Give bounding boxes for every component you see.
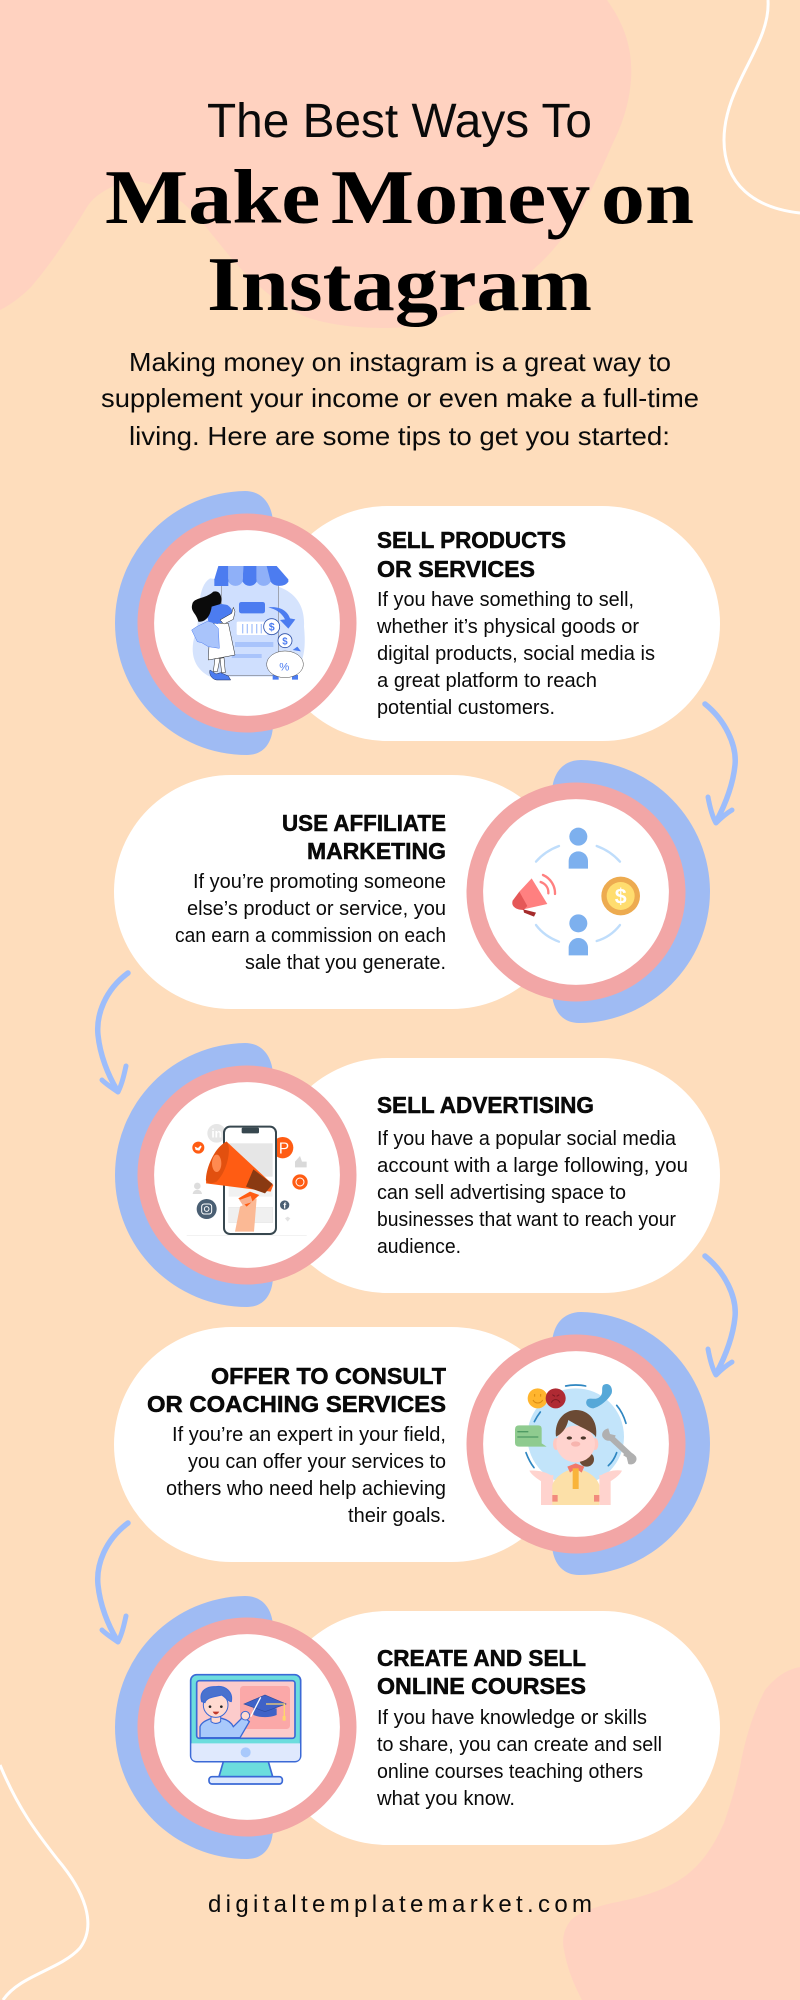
heading xyxy=(377,1645,586,1699)
ring xyxy=(475,1343,677,1545)
white pill xyxy=(114,1327,569,1562)
body xyxy=(166,1424,446,1527)
decorative line: top right xyxy=(724,0,800,213)
heading xyxy=(147,1363,446,1417)
blue crescent xyxy=(115,491,273,755)
body xyxy=(376,589,655,719)
body: to share, you can create and sell xyxy=(377,1734,662,1756)
footer url: digitaltemplatemarket.com xyxy=(208,1891,592,1918)
heading: MARKETING xyxy=(307,838,446,864)
icon: online store shopper: $ xyxy=(282,636,288,647)
arrow: step 3 to 4 xyxy=(705,1256,735,1375)
icon: customer support woman xyxy=(515,1384,637,1505)
title line 3: Instagram xyxy=(207,241,592,327)
text: sell advertising xyxy=(377,1092,688,1258)
title xyxy=(105,95,694,327)
icon: phone with megaphone: P xyxy=(279,1140,289,1157)
body: you can offer your services to xyxy=(188,1451,446,1473)
body: businesses that want to reach your xyxy=(377,1209,676,1231)
body: can sell advertising space to xyxy=(377,1182,626,1204)
body: If you have a popular social media xyxy=(377,1128,677,1150)
icon: online teacher on monitor xyxy=(191,1675,301,1784)
heading: CREATE AND SELL xyxy=(377,1645,586,1671)
body: sale that you generate. xyxy=(245,952,446,974)
body: else’s product or service, you xyxy=(187,898,446,920)
heading: OR COACHING SERVICES xyxy=(147,1391,446,1417)
body xyxy=(175,871,446,974)
white pill xyxy=(270,506,720,741)
icon: online store shopper xyxy=(192,566,305,680)
intro paragraph xyxy=(101,347,699,451)
body: account with a large following, you xyxy=(377,1155,688,1177)
icon: phone with megaphone: in xyxy=(211,1127,222,1141)
intro paragraph: supplement your income or even make a full-time xyxy=(101,383,699,413)
body: online courses teaching others xyxy=(377,1761,643,1783)
body: potential customers. xyxy=(377,697,555,719)
ring xyxy=(146,1626,348,1828)
intro paragraph: Making money on instagram is a great way to xyxy=(129,347,671,377)
body: whether it’s physical goods or xyxy=(376,616,639,638)
intro paragraph: living. Here are some tips to get you started: xyxy=(129,421,670,451)
text: sell products xyxy=(376,527,655,719)
heading: SELL PRODUCTS xyxy=(377,527,566,553)
white pill xyxy=(270,1058,720,1293)
body: If you have knowledge or skills xyxy=(377,1707,647,1729)
body: others who need help achieving xyxy=(166,1478,446,1500)
panel: offer to consult xyxy=(114,1312,710,1575)
body xyxy=(377,1128,688,1258)
white pill xyxy=(270,1611,720,1845)
text: use affiliate marketing xyxy=(175,810,446,974)
text: offer to consult xyxy=(147,1363,446,1527)
body: audience. xyxy=(377,1236,461,1258)
body: can earn a commission on each xyxy=(175,925,446,947)
icon: affiliate network xyxy=(512,828,640,955)
body xyxy=(376,1707,662,1810)
blob: top left xyxy=(0,0,631,328)
text: online courses xyxy=(376,1645,662,1810)
icon: affiliate network: $ xyxy=(615,885,627,909)
body: If you have something to sell, xyxy=(377,589,634,611)
heading: SELL ADVERTISING xyxy=(377,1092,594,1118)
panel: online courses xyxy=(115,1596,720,1859)
panel: use affiliate marketing xyxy=(114,760,710,1023)
body: digital products, social media is xyxy=(377,643,655,665)
ring xyxy=(146,1074,348,1276)
panel: sell advertising xyxy=(115,1043,720,1307)
title line 2: Make Money on xyxy=(105,154,694,240)
heading: OFFER TO CONSULT xyxy=(211,1363,446,1389)
body: their goals. xyxy=(348,1505,446,1527)
blue crescent xyxy=(115,1596,273,1859)
heading xyxy=(282,810,446,864)
body: If you’re an expert in your field, xyxy=(172,1424,446,1446)
ring xyxy=(475,791,677,993)
panel: sell products xyxy=(115,491,720,755)
body: a great platform to reach xyxy=(377,670,597,692)
arrow: step 2 to 3 xyxy=(98,973,128,1092)
arrow: step 4 to 5 xyxy=(98,1523,128,1642)
heading: ONLINE COURSES xyxy=(377,1673,586,1699)
blue crescent xyxy=(552,760,710,1023)
blue crescent xyxy=(115,1043,273,1307)
ring xyxy=(146,522,348,724)
heading: USE AFFILIATE xyxy=(282,810,446,836)
blob: bottom right xyxy=(563,1667,800,2000)
body: what you know. xyxy=(376,1788,515,1810)
body: If you’re promoting someone xyxy=(193,871,446,893)
heading: OR SERVICES xyxy=(377,556,535,582)
title line 1: The Best Ways To xyxy=(207,95,592,148)
icon: phone with megaphone: f xyxy=(283,1200,286,1210)
icon: online store shopper: % xyxy=(279,662,289,674)
heading xyxy=(377,527,566,582)
decorative line: bottom left xyxy=(0,1765,88,2000)
arrow: step 1 to 2 xyxy=(705,704,735,823)
icon: online store shopper: $ xyxy=(269,622,275,634)
white pill xyxy=(114,775,569,1009)
blue crescent xyxy=(552,1312,710,1575)
icon: phone with megaphone xyxy=(187,1124,308,1236)
